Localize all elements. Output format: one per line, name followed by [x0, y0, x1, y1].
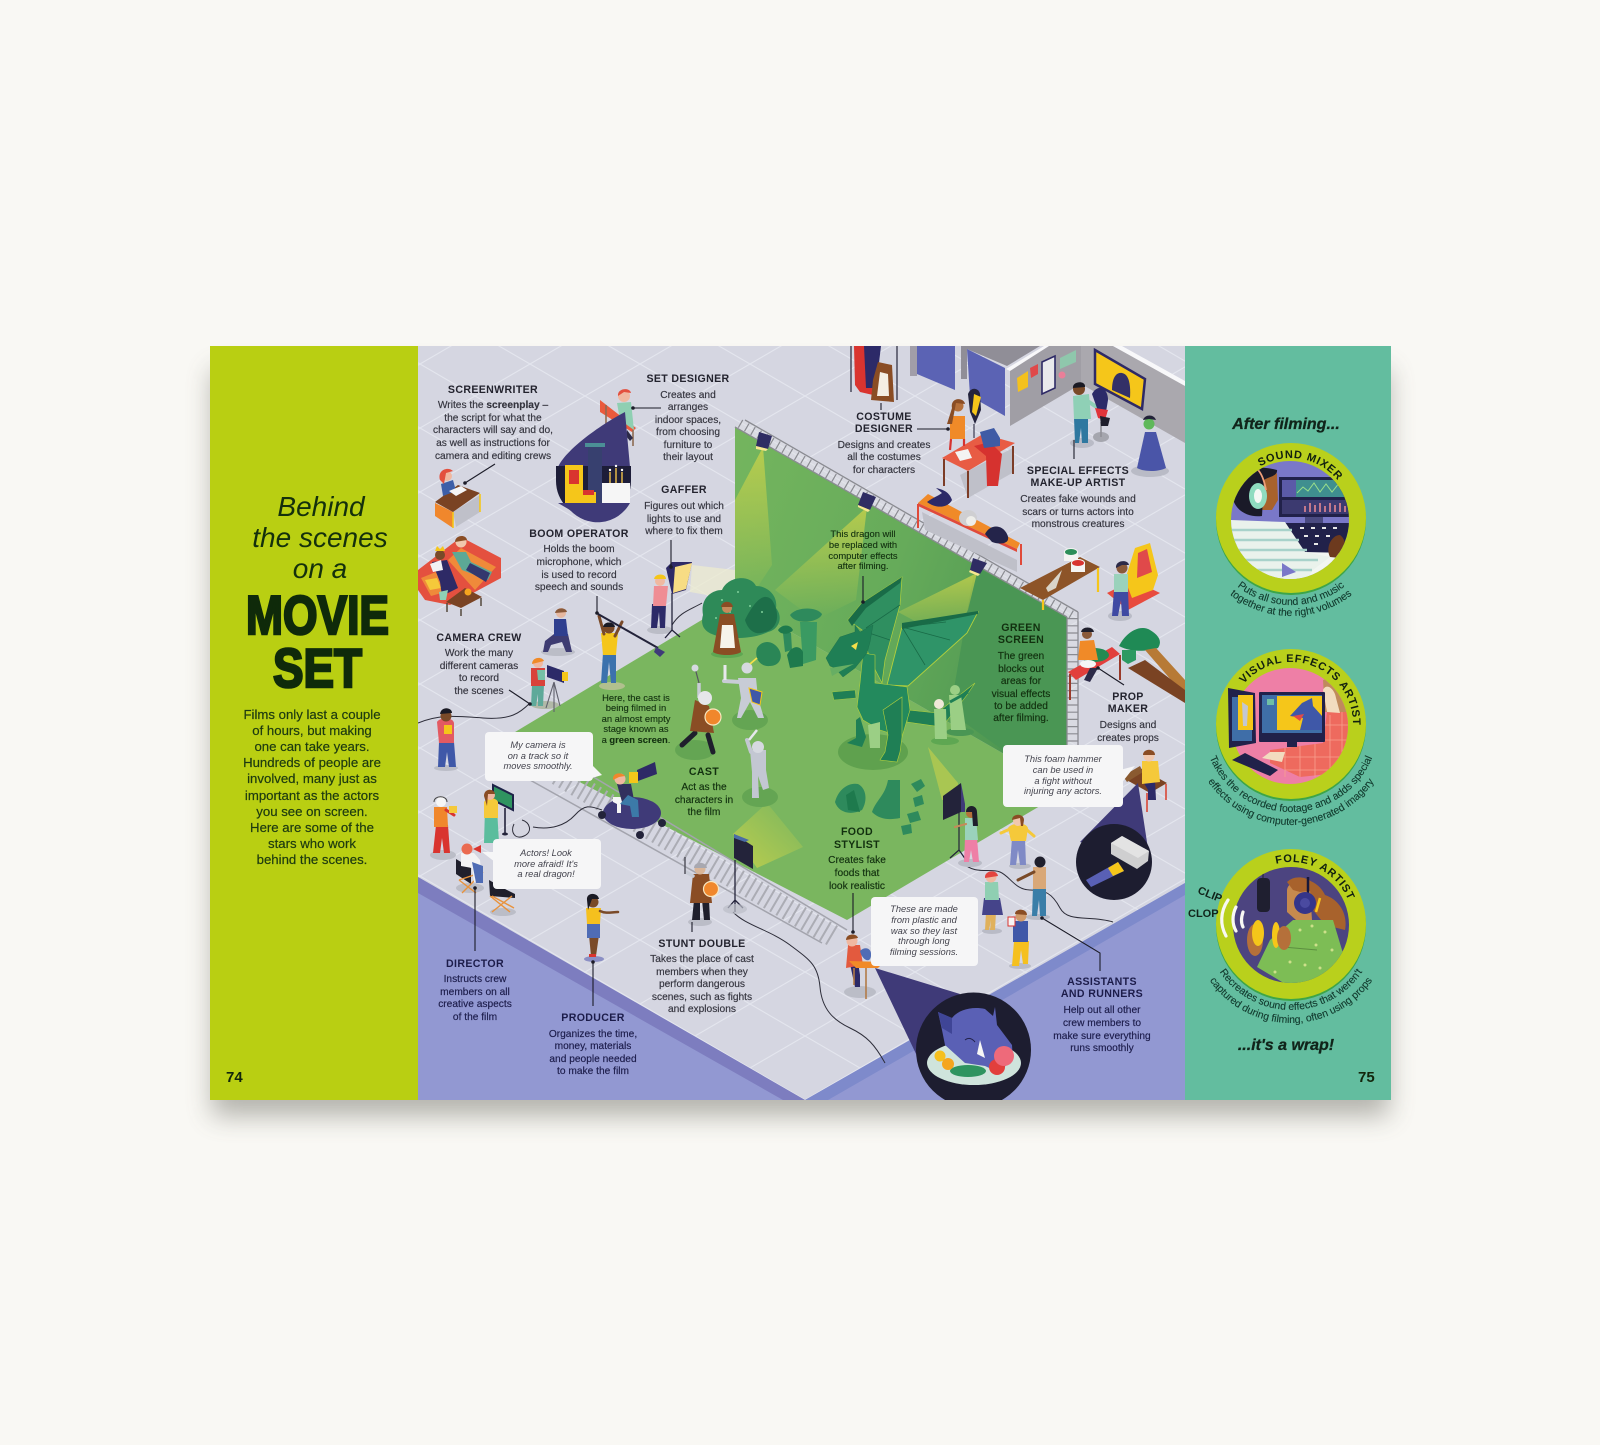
label: camera crew [436, 632, 522, 697]
label: green screen: blocks out [998, 664, 1044, 675]
label: camera crew: different cameras [440, 661, 518, 672]
dragon tail [907, 683, 975, 727]
director in chair with megaphone [456, 844, 484, 893]
label: prop maker: PROP [1112, 691, 1144, 703]
throne painter [1108, 561, 1132, 621]
camera crew woman [434, 708, 458, 771]
speech bubble: director: Actors! Look [519, 848, 573, 858]
label: cast: Act as the [681, 782, 727, 793]
studio light right [943, 783, 966, 860]
label: green screen: visual effects [992, 689, 1050, 700]
callout: food props: through long [898, 936, 951, 946]
label: stunt double: scenes, such as fights [652, 992, 752, 1003]
label: set designer: furniture to [664, 440, 713, 451]
inset: foam boar head [875, 968, 1031, 1108]
note: dragon replaced: after filming. [837, 560, 889, 571]
label: set designer: Creates and [660, 390, 716, 401]
badge: visual effects artist: effects using computer-generated imagery [1208, 778, 1374, 826]
label: camera crew: Work the many [445, 648, 514, 659]
callout: foam hammer: can be used in [1033, 765, 1093, 775]
badge: foley artist: FOLEY ARTIST [1275, 854, 1355, 898]
label: producer: money, materials [555, 1041, 631, 1052]
label: set designer: from choosing [656, 427, 720, 438]
label: special effects make-up artist: monstrous creatures [1032, 519, 1124, 530]
label: food stylist: look realistic [829, 881, 885, 892]
light beams on wall [690, 447, 977, 868]
label: director [438, 958, 512, 1023]
inset: set design teardrop [556, 412, 631, 522]
purple floor right edge [805, 883, 1185, 1100]
intro paragraph: involved, many just as [247, 771, 377, 786]
wall screen [1095, 350, 1145, 409]
intro paragraph: Films only last a couple [243, 707, 381, 722]
panel: left title column [210, 346, 418, 1100]
clip clop label [1188, 885, 1224, 920]
label: stunt double: and explosions [668, 1004, 736, 1015]
prop maker table, rocks and planks [1068, 628, 1185, 703]
label: gaffer: where to fix them [644, 526, 723, 537]
label: food stylist: STYLIST [834, 839, 880, 851]
speech bubble: director: more afraid! It's [514, 859, 578, 869]
label: director: creative aspects [438, 999, 512, 1010]
speech bubble: camera track [485, 732, 602, 781]
label: gaffer: GAFFER [661, 484, 707, 496]
badge: visual effects artist [1208, 649, 1374, 826]
stunt double [685, 857, 718, 926]
purple floor right [805, 883, 1185, 1100]
make-up artist, mannequin and green witch [1070, 382, 1169, 477]
label: costume designer: COSTUME [856, 411, 912, 423]
label: green screen: GREEN [1001, 622, 1041, 634]
assistant with skirt [982, 871, 1003, 934]
label: assistants and runners: Help out all other [1063, 1005, 1141, 1016]
rear room walls [1006, 346, 1185, 443]
label: assistants and runners: crew members to [1063, 1018, 1141, 1029]
woman in yellow sweater [1001, 815, 1034, 869]
purple floor left [418, 877, 805, 1100]
label: costume designer: DESIGNER [855, 423, 913, 435]
speech bubble: director [482, 839, 601, 889]
scenery bush [702, 578, 780, 638]
label: set designer [646, 373, 730, 463]
title: behind the scenes on a movie set: Behind [277, 491, 366, 522]
gaffer with softbox light [647, 562, 692, 638]
dragon head [826, 625, 873, 677]
boom operator [598, 614, 665, 690]
note: green screen stage: Here, the cast is [602, 692, 670, 703]
label: boom operator: Holds the boom [543, 544, 615, 555]
assistant man [1018, 856, 1050, 920]
callout: foam hammer [1003, 745, 1135, 807]
callout: food props: wax so they last [891, 926, 957, 936]
camera track [530, 777, 848, 945]
dragon neck and body [857, 653, 910, 737]
sound waves [1222, 900, 1243, 936]
label: assistants and runners: runs smoothly [1070, 1043, 1135, 1054]
callout: food props: filming sessions. [890, 947, 958, 957]
speech bubble: camera track: My camera is [510, 740, 566, 750]
label: food stylist: Creates fake [828, 855, 886, 866]
truss lamps [756, 432, 987, 576]
green-suited stunt helpers [931, 685, 974, 745]
label: cast: the film [688, 807, 720, 818]
label: assistants and runners [1053, 976, 1151, 1054]
label: director: of the film [453, 1012, 497, 1023]
label: prop maker [1097, 691, 1159, 744]
title: behind the scenes on a movie set: on a [293, 553, 347, 584]
green wall darker right section [953, 570, 1033, 736]
clip clop label: CLOP [1188, 908, 1219, 920]
label: producer: to make the film [557, 1066, 629, 1077]
panel: after filming column [1185, 346, 1391, 1100]
dress form [968, 389, 981, 424]
label: special effects make-up artist: scars or turns actors into [1022, 507, 1134, 518]
prop table with hat and skull [922, 512, 1017, 572]
label: director: members on all [440, 987, 510, 998]
label: set designer: indoor spaces, [655, 415, 721, 426]
food stylist [844, 934, 884, 999]
visual effects monitors [1228, 688, 1325, 776]
actress in apron dress [711, 602, 743, 658]
badge: sound mixer: SOUND MIXER [1258, 450, 1342, 480]
title: behind the scenes on a movie set: the scenes [252, 522, 388, 553]
label: camera crew: CAMERA CREW [436, 632, 522, 644]
label: director: Instructs crew [444, 974, 507, 985]
boom pole [598, 614, 658, 648]
prop maker figure [1078, 628, 1098, 682]
page number 75: 75 [1358, 1069, 1375, 1086]
label: costume designer [838, 411, 930, 476]
label: boom operator [529, 528, 629, 593]
label: special effects make-up artist: MAKE-UP ARTIST [1031, 477, 1126, 489]
fighter with round shield [675, 664, 721, 760]
label: stunt double: members when they [656, 967, 749, 978]
dragon near wing [887, 612, 978, 686]
actor on sofa [452, 552, 492, 580]
label: prop maker: MAKER [1108, 703, 1148, 715]
label: assistants and runners: make sure everything [1053, 1031, 1151, 1042]
label: screenwriter: SCREENWRITER [448, 384, 538, 396]
monitor and script supervisor [484, 785, 513, 843]
dragon limbs [832, 690, 856, 700]
label: food stylist [828, 826, 886, 892]
label: screenwriter [433, 384, 553, 462]
note: green screen stage: a green screen. [602, 734, 670, 745]
costume rack and curtains [851, 346, 1040, 416]
title: behind the scenes on a movie set [246, 491, 389, 699]
intro paragraph: Hundreds of people are [243, 755, 381, 770]
clip clop label: CLIP [1196, 885, 1224, 905]
purple floor left edge [418, 877, 805, 1100]
intro paragraph: behind the scenes. [257, 852, 367, 867]
costume tables [918, 428, 1021, 572]
inset: foam hammer [1076, 783, 1152, 900]
label: camera crew: the scenes [454, 686, 504, 697]
label: special effects make-up artist [1020, 465, 1136, 530]
label: cast: characters in [675, 795, 733, 806]
label: green screen [992, 622, 1050, 724]
costume designer figure [947, 389, 981, 450]
label: green screen: The green [998, 651, 1044, 662]
note: dragon replaced: be replaced with [829, 539, 897, 550]
label: special effects make-up artist: SPECIAL EFFECTS [1027, 465, 1129, 477]
label: screenwriter: the script for what the [444, 413, 542, 424]
truss rig [735, 420, 1078, 745]
label: producer: Organizes the time, [549, 1029, 637, 1040]
callout: food props: These are made [890, 904, 958, 914]
woman in pink trousers [955, 806, 982, 867]
label: boom operator: BOOM OPERATOR [529, 528, 629, 540]
label: camera crew: to record [459, 673, 499, 684]
label: prop maker: Designs and [1100, 720, 1157, 731]
visual effects illustration [1262, 679, 1352, 777]
label: boom operator: speech and sounds [535, 582, 623, 593]
screenwriter at desk [435, 469, 480, 528]
label: screenwriter: characters will say and do, [433, 425, 553, 436]
label: gaffer: Figures out which [644, 501, 724, 512]
sound mixer illustration [1230, 467, 1350, 590]
label: special effects make-up artist: Creates fake wounds and [1020, 494, 1136, 505]
label: food stylist: FOOD [841, 826, 873, 838]
camera crew operator with tripod camera [531, 658, 568, 712]
set designer [600, 389, 636, 448]
label: costume designer: for characters [853, 465, 915, 476]
intro paragraph: stars who work [268, 836, 356, 851]
knight with blue shield [724, 658, 768, 730]
badge: sound mixer: together at the right volumes [1230, 590, 1352, 618]
foley illustration [1247, 868, 1346, 985]
label: green screen: areas for [1001, 676, 1042, 687]
speech bubble: camera track: moves smoothly. [503, 761, 573, 771]
empty director chair [489, 880, 516, 916]
green screen floor [515, 620, 1038, 920]
heading: after filming: After filming... [1231, 416, 1340, 433]
note: dragon replaced: computer effects [828, 550, 898, 561]
producer [584, 894, 618, 962]
badge: sound mixer [1216, 443, 1366, 618]
label: assistants and runners: AND RUNNERS [1061, 988, 1143, 1000]
badge: visual effects artist: VISUAL EFFECTS ARTIST [1238, 654, 1361, 725]
book drop shadow [212, 370, 1389, 1116]
label: food stylist: foods that [835, 868, 880, 879]
stunt performer behind dragon leg [868, 722, 880, 748]
intro paragraph: you see on screen. [256, 804, 368, 819]
cables [418, 603, 1113, 1063]
callout: foam hammer: a fight without [1034, 776, 1092, 786]
label: boom operator: microphone, which [537, 557, 621, 568]
title: behind the scenes on a movie set: MOVIE [246, 584, 389, 646]
badge: foley artist [1188, 849, 1372, 1025]
panel: isometric film set [418, 346, 1185, 1108]
label: gaffer [644, 484, 724, 537]
assistant with clipboard [1008, 910, 1031, 969]
label: costume designer: all the costumes [847, 452, 921, 463]
label: stunt double: STUNT DOUBLE [658, 938, 746, 950]
green mushroom rocks [756, 608, 822, 668]
queen on sofa [432, 560, 458, 596]
intro paragraph: one can take years. [254, 739, 370, 754]
page number 74: 74 [226, 1069, 243, 1086]
label: green screen: to be added [994, 701, 1048, 712]
dragon far wing [848, 577, 902, 683]
label: set designer: SET DESIGNER [646, 373, 730, 385]
label: costume designer: Designs and creates [838, 440, 930, 451]
label: producer: PRODUCER [561, 1012, 625, 1024]
speech bubble: camera track: on a track so it [508, 751, 569, 761]
speech bubble: director: a real dragon! [517, 869, 575, 879]
callout: foam hammer: This foam hammer [1024, 754, 1103, 764]
label: prop maker: creates props [1097, 733, 1159, 744]
label: screenwriter: Writes the screenplay – [438, 400, 548, 411]
intro paragraph: of hours, but making [252, 723, 372, 738]
leader lines [463, 403, 1124, 1006]
clipboard crew member [430, 797, 457, 860]
label: stunt double: perform dangerous [659, 979, 745, 990]
intro paragraph: important as the actors [245, 788, 379, 803]
title: behind the scenes on a movie set: SET [273, 637, 362, 699]
callout: food props: from plastic and [891, 915, 958, 925]
green foam props on floor [835, 779, 925, 835]
note: green screen stage: stage known as [603, 723, 669, 734]
kneeling camera operator [541, 608, 575, 656]
dragon [826, 577, 978, 770]
label: set designer: arranges [668, 402, 708, 413]
label: screenwriter: as well as instructions for [436, 438, 551, 449]
callout: food props [871, 897, 978, 966]
coffee table [446, 588, 482, 608]
label: screenwriter: camera and editing crews [435, 451, 551, 462]
label: cast [675, 766, 733, 818]
throne prop [1107, 543, 1160, 610]
label: director: DIRECTOR [446, 958, 504, 970]
green screen wall [735, 428, 1066, 754]
closing line: it's a wrap: ...it's a wrap! [1238, 1037, 1335, 1054]
note: dragon replaced: This dragon will [830, 528, 896, 539]
caption: sound mixer: Puts all sound and music [1238, 581, 1344, 606]
label: green screen: after filming. [993, 713, 1049, 724]
sofa set [418, 536, 501, 616]
label: stunt double: Takes the place of cast [650, 954, 754, 965]
caption: foley artist: Recreates sound effects that weren't [1220, 968, 1362, 1010]
note: green screen stage: an almost empty [602, 713, 671, 724]
label: gaffer: lights to use and [647, 514, 721, 525]
label: boom operator: is used to record [541, 570, 617, 581]
note: green screen stage: being filmed in [606, 702, 666, 713]
label: stunt double [650, 938, 754, 1015]
callout: foam hammer: injuring any actors. [1024, 786, 1102, 796]
label: producer [549, 1012, 637, 1077]
label: assistants and runners: ASSISTANTS [1067, 976, 1137, 988]
studio light left [723, 834, 753, 914]
silver knight with sword [742, 730, 778, 807]
label: producer: and people needed [549, 1054, 637, 1065]
camera dolly with operator [598, 762, 666, 839]
label: cast: CAST [689, 766, 719, 778]
label: set designer: their layout [663, 452, 713, 463]
hammer maker at desk [1123, 750, 1167, 812]
label: green screen: SCREEN [998, 634, 1044, 646]
badge: foley artist: captured during filming, often using props [1210, 978, 1372, 1025]
paint table [1020, 548, 1100, 610]
intro paragraph: Here are some of the [250, 820, 374, 835]
caption: visual effects artist: Takes the recorded footage and adds special [1210, 754, 1372, 814]
